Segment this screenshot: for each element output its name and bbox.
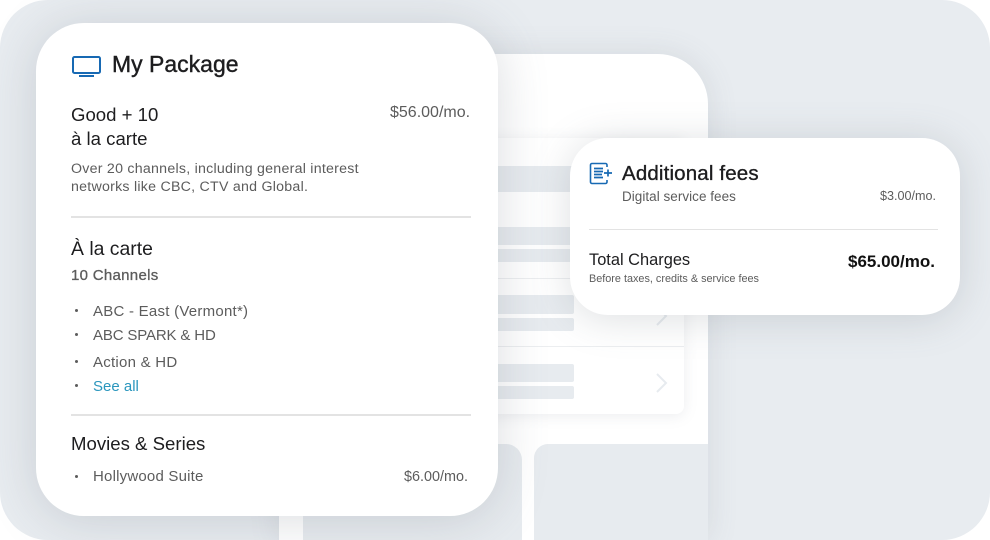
total note: Before taxes, credits & service fees	[589, 273, 759, 285]
panel: background phone screen	[279, 54, 708, 540]
channel list: ABC SPARK & HD	[93, 327, 216, 344]
heading: movies and series: Movies & Series	[71, 433, 205, 454]
channel list: Action & HD	[93, 354, 177, 371]
plan name: Good + 10 à la carte	[71, 104, 158, 149]
title: additional fees: Additional fees	[622, 162, 759, 185]
divider	[71, 216, 471, 218]
channel list: ABC - East (Vermont*)	[93, 303, 248, 320]
panel: placeholder list card	[303, 138, 684, 414]
heading: a la carte: À la carte	[71, 238, 153, 260]
title: my package: My Package	[112, 51, 239, 77]
divider	[71, 414, 471, 416]
icon: chevron lower	[656, 374, 667, 392]
digital service fees: Digital service fees	[622, 189, 736, 204]
total price: $65.00/mo.	[848, 252, 935, 271]
placeholder tile right	[534, 444, 708, 540]
total charges: Total Charges	[589, 251, 690, 269]
icon: chevron upper	[656, 315, 667, 326]
channel count: 10 Channels	[71, 267, 159, 284]
icon: tv	[72, 56, 101, 77]
movie price: $6.00/mo.	[404, 469, 468, 485]
placeholder tile left	[303, 444, 522, 540]
channel list	[75, 303, 248, 395]
placeholder bars	[498, 166, 684, 399]
channel list: See all	[93, 378, 139, 395]
digital fee price: $3.00/mo.	[880, 189, 936, 203]
plan description: Over 20 channels, including general interest networks like CBC, CTV and Global.	[71, 161, 359, 195]
icon: fees document plus	[590, 162, 612, 184]
panel: additional fees	[570, 138, 960, 315]
divider	[589, 229, 938, 230]
plan price: $56.00/mo.	[390, 104, 470, 121]
panel: my package	[36, 23, 498, 516]
movie item: Hollywood Suite	[93, 468, 204, 485]
